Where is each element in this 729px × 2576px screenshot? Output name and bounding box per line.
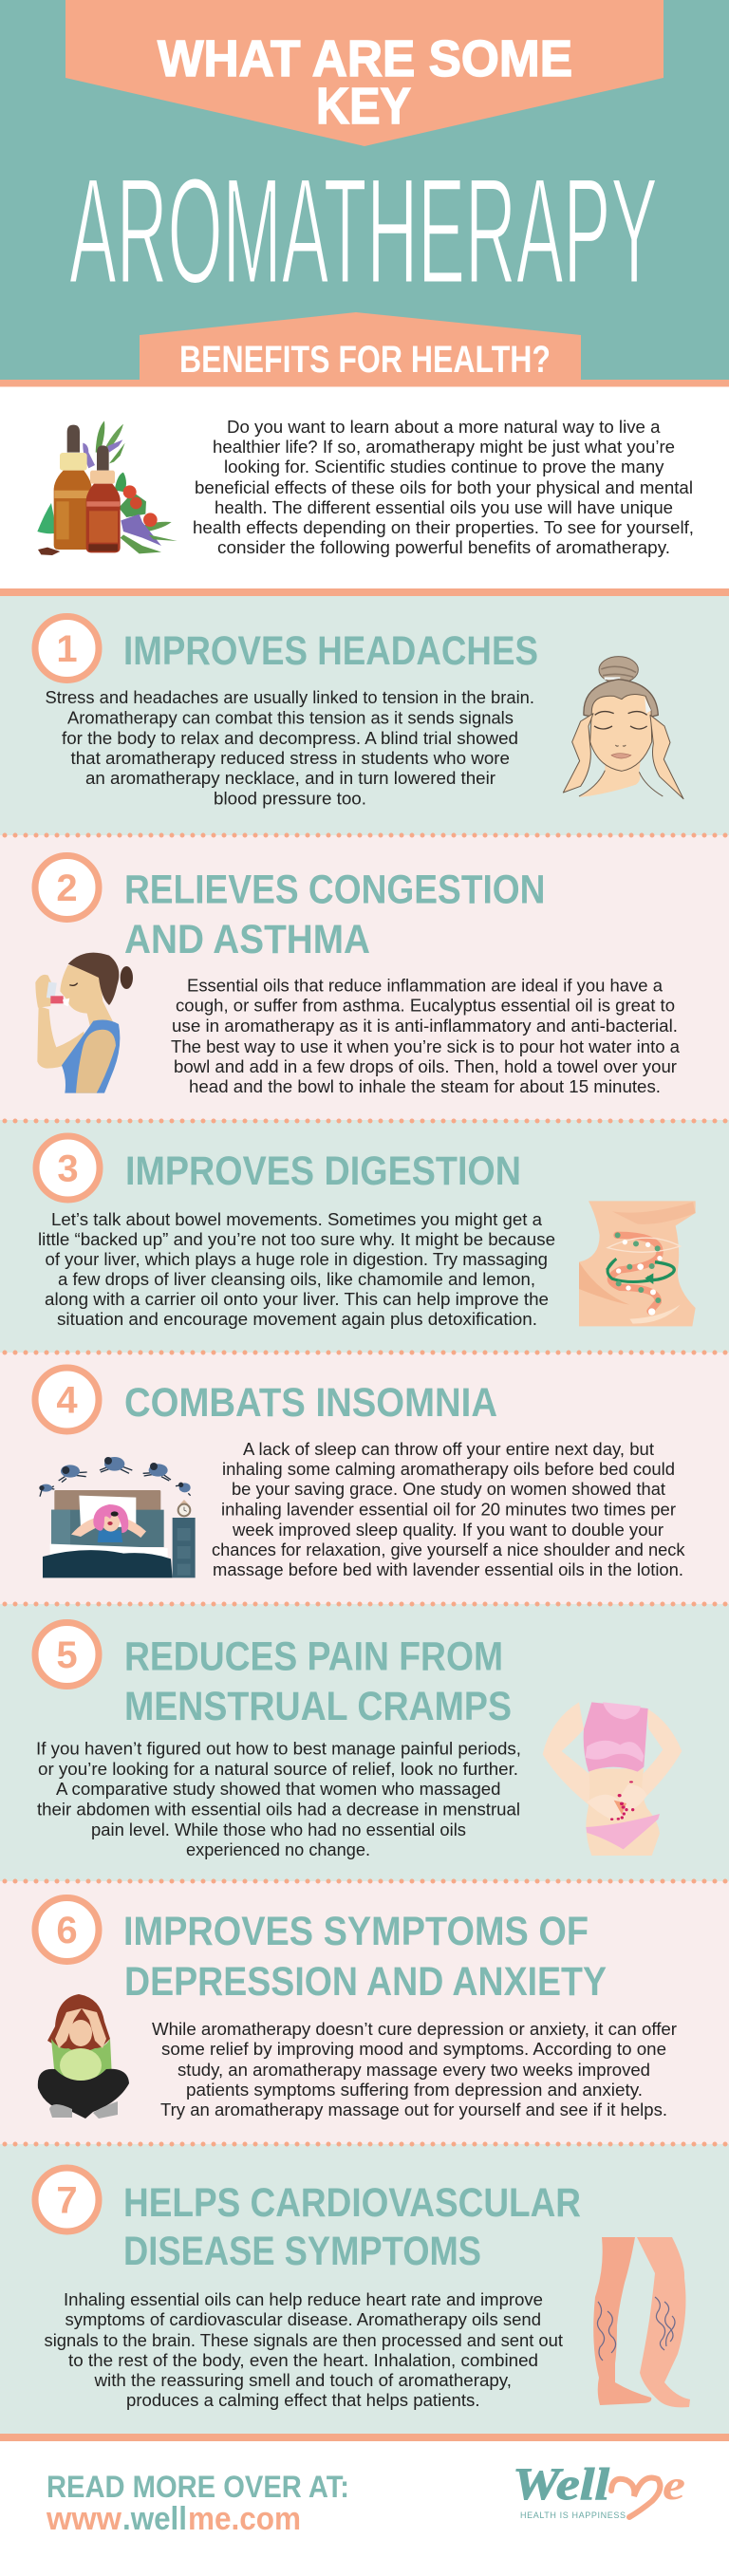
logo: wellme: Well (513, 2459, 610, 2510)
number badge 4: 4 (56, 1380, 78, 1422)
heading: what are some key: WHAT ARE SOME (158, 30, 572, 87)
intro text: consider the following powerful benefits of aromatherapy. (217, 538, 670, 557)
body text 1: blood pressure too. (214, 790, 366, 809)
number badge 4 (35, 1368, 99, 1431)
body text 6 (152, 2020, 677, 2119)
divider band (0, 2434, 729, 2441)
body text 4: chances for relaxation, give yourself a nice shoulder and neck (212, 1540, 685, 1559)
body text 6: some relief by improving mood and symptoms. According to one (161, 2040, 666, 2059)
body text 4: week improved sleep quality. If you want to double your (232, 1521, 664, 1540)
logo: wellme (513, 2459, 685, 2520)
icon: abdomen massage (579, 1201, 696, 1326)
heading 2: RELIEVES CONGESTION (124, 868, 545, 913)
body text 5: or you’re looking for a natural source of relief, look no further. (38, 1760, 518, 1779)
body text 7: with the reassuring smell and touch of aromatherapy, (93, 2371, 512, 2390)
number badge 3: 3 (57, 1148, 79, 1190)
body text 7: produces a calming effect that helps patients. (126, 2391, 479, 2410)
body text 4: be your saving grace. One study on women showed that (232, 1480, 665, 1499)
body text 2: The best way to use it when you’re sick is to pour hot water into a (171, 1037, 681, 1056)
body text 1 (46, 688, 534, 809)
top ribbon banner (65, 0, 664, 146)
number badge 1: 1 (56, 628, 78, 670)
icon: woman using inhaler (35, 953, 133, 1093)
number badge 6: 6 (56, 1910, 78, 1951)
body text 7: Inhaling essential oils can help reduce heart rate and improve (64, 2290, 543, 2309)
panel: 5 reduces pain from menstrual cramps (0, 1604, 729, 1881)
number badge 5: 5 (56, 1634, 78, 1676)
body text 5 (36, 1739, 521, 1859)
heading 6 (123, 1909, 607, 2005)
body text 5: their abdomen with essential oils had a decrease in menstrual (37, 1800, 520, 1819)
body text 2: use in aromatherapy as it is anti-inflammatory and anti-bacterial. (172, 1017, 678, 1036)
body text 6: Try an aromatherapy massage out for yourself and see if it helps. (160, 2100, 667, 2119)
number badge 3 (36, 1136, 100, 1200)
body text 1: Stress and headaches are usually linked to tension in the brain. (46, 688, 534, 707)
body text 5: pain level. While those who had no essential oils (91, 1820, 466, 1839)
body text 7: symptoms of cardiovascular disease. Aromatherapy oils send (65, 2310, 541, 2329)
body text 5: If you haven’t figured out how to best manage painful periods, (36, 1739, 521, 1758)
number badge 2 (35, 856, 99, 919)
website url (46, 2501, 301, 2537)
body text 1: for the body to relax and decompress. A blind trial showed (62, 729, 518, 748)
body text 7 (44, 2290, 563, 2410)
logo: wellme: e (663, 2462, 685, 2509)
heading: what are some key: KEY (316, 78, 411, 135)
panel: 4 combats insomnia (0, 1353, 729, 1604)
heading 7 (123, 2180, 581, 2274)
call to action (46, 2470, 349, 2537)
number badge 6 (35, 1898, 99, 1961)
heading 7: HELPS CARDIOVASCULAR (123, 2180, 581, 2226)
body text 2 (171, 977, 681, 1096)
divider band (0, 588, 729, 596)
read more heading: READ MORE OVER AT: (47, 2470, 349, 2504)
section dotted dividers (5, 835, 729, 2144)
icon: woman with headache (563, 657, 683, 799)
intro text: looking for. Scientific studies continue to prove the many (224, 457, 664, 476)
heading 1: IMPROVES HEADACHES (123, 628, 538, 674)
intro text: healthier life? If so, aromatherapy might be just what you’re (213, 438, 675, 457)
panel: 3 improves digestion (0, 1120, 729, 1353)
panel: 2 relieves congestion and asthma (0, 835, 729, 1120)
body text 3: a few drops of liver cleansing oils, like chamomile and lemon, (58, 1270, 535, 1289)
icon: essential oil bottles (37, 420, 178, 555)
number badge 7 (35, 2168, 99, 2231)
body text 6: patients symptoms suffering from depression and anxiety. (186, 2081, 643, 2100)
body text 3: little “backed up” and you’re not too sure why. It might be because (38, 1230, 555, 1249)
number badge 7: 7 (56, 2179, 78, 2221)
logo: wellme: HEALTH IS HAPPINESS (520, 2511, 626, 2520)
body text 5: experienced no change. (186, 1840, 370, 1859)
body text 1: Aromatherapy can combat this tension as it sends signals (67, 708, 514, 727)
body text 2: cough, or suffer from asthma. Eucalyptus essential oil is great to (176, 997, 675, 1016)
body text 4: A lack of sleep can throw off your entire next day, but (243, 1440, 654, 1459)
body text 5: A comparative study showed that women who massaged (56, 1780, 501, 1799)
body text 3: situation and encourage movement again plus detoxification. (57, 1310, 537, 1329)
body text 3 (38, 1210, 555, 1329)
body text 4 (212, 1440, 685, 1579)
intro text: beneficial effects of these oils for both your physical and mental (195, 478, 693, 497)
body text 3: along with a carrier oil onto your liver. This can help improve the (45, 1290, 549, 1309)
number badge 5 (35, 1623, 99, 1686)
icon: woman holding abdomen (543, 1702, 682, 1856)
icon: anxious woman sitting cross-legged (38, 1994, 129, 2119)
intro text (193, 418, 694, 557)
intro text: health. The different essential oils you use will have unique (215, 498, 673, 517)
website url: .well (122, 2501, 187, 2537)
body text 2: bowl and add in a few drops of oils. Then, hold a towel over your (174, 1057, 677, 1076)
heading: what are some key (158, 30, 572, 135)
website url: me.com (188, 2501, 301, 2537)
icon: sleepless woman in bed with sheep (39, 1457, 196, 1577)
icon: legs with varicose veins (593, 2237, 690, 2407)
body text 7: to the rest of the body, even the heart. Inhalation, combined (68, 2351, 538, 2370)
intro text: health effects depending on their properties. To see for yourself, (193, 518, 694, 537)
heading 5: REDUCES PAIN FROM (124, 1634, 503, 1680)
bottom ribbon banner (140, 312, 581, 380)
header panel (0, 0, 729, 387)
heading 3: IMPROVES DIGESTION (125, 1148, 521, 1194)
heading 5: MENSTRUAL CRAMPS (124, 1684, 512, 1729)
heading 7: DISEASE SYMPTOMS (123, 2229, 481, 2274)
number badge 1 (35, 617, 99, 680)
body text 4: massage before bed with lavender essential oils in the lotion. (213, 1560, 683, 1579)
panel: 6 improves symptoms of depression and anxiety (0, 1881, 729, 2144)
intro text: Do you want to learn about a more natural way to live a (227, 418, 662, 437)
body text 7: signals to the brain. These signals are then processed and sent out (44, 2331, 563, 2350)
heading 2 (124, 868, 545, 962)
number badge 2: 2 (56, 868, 78, 909)
body text 3: Let’s talk about bowel movements. Sometimes you might get a (51, 1210, 543, 1229)
heading 2: AND ASTHMA (124, 917, 370, 962)
subtitle: benefits for health: BENEFITS FOR HEALTH? (179, 339, 551, 381)
website url: www (46, 2501, 122, 2537)
body text 3: of your liver, which plays a huge role in digestion. Try massaging (46, 1250, 548, 1269)
body text 4: inhaling lavender essential oil for 20 minutes two times per (221, 1500, 676, 1519)
body text 2: head and the bowl to inhale the steam for about 15 minutes. (189, 1077, 661, 1096)
body text 2: Essential oils that reduce inflammation are ideal if you have a (187, 977, 664, 996)
panel: 1 improves headaches (0, 596, 729, 835)
heading 6: DEPRESSION AND ANXIETY (124, 1959, 607, 2005)
body text 4: inhaling some calming aromatherapy oils before bed could (222, 1460, 675, 1479)
heading 4: COMBATS INSOMNIA (124, 1380, 497, 1426)
body text 6: study, an aromatherapy massage every two weeks improved (178, 2061, 650, 2080)
heading 5 (124, 1634, 512, 1729)
body text 6: While aromatherapy doesn’t cure depression or anxiety, it can offer (152, 2020, 677, 2039)
panel: 7 helps cardiovascular disease symptoms (0, 2144, 729, 2434)
body text 1: that aromatherapy reduced stress in students who wore (70, 749, 510, 768)
body text 1: an aromatherapy necklace, and in turn lowered their (85, 769, 495, 788)
heading 6: IMPROVES SYMPTOMS OF (123, 1909, 589, 1954)
